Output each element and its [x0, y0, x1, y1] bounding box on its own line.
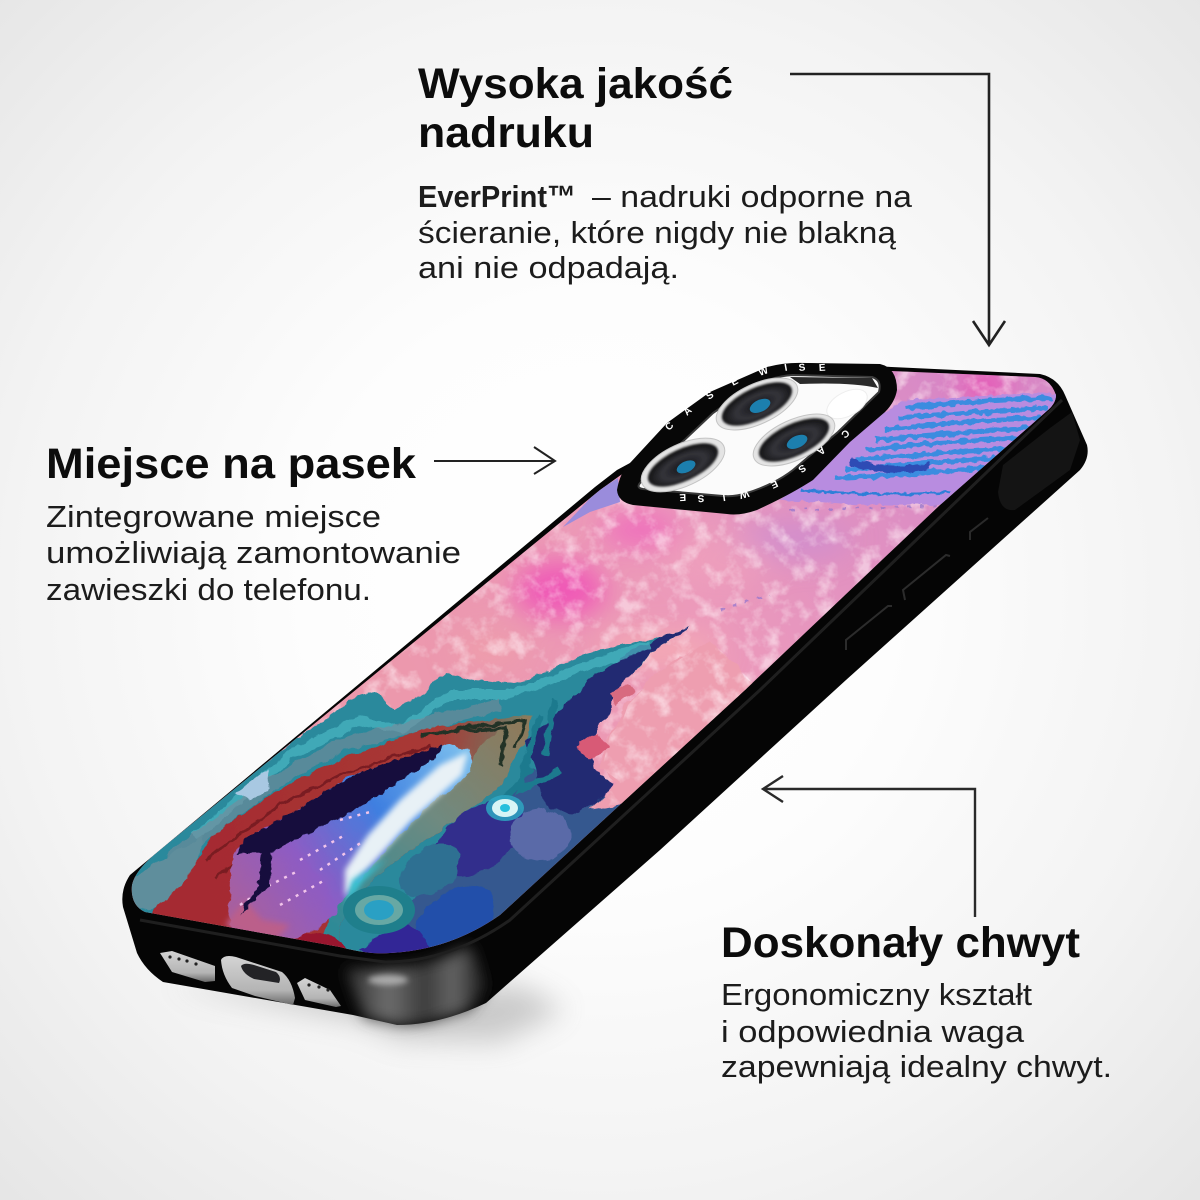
dusty band — [170, 705, 500, 860]
pale teal bands — [195, 645, 650, 838]
cavity — [236, 746, 442, 915]
deep purple — [359, 924, 430, 954]
heading — [418, 60, 733, 157]
body text — [721, 977, 1112, 1084]
brand text top: CASEWISE — [663, 362, 826, 433]
arrow — [434, 447, 555, 474]
blue stripes region — [780, 392, 1060, 505]
speaker right — [297, 978, 341, 1007]
pale blue patch — [236, 770, 270, 800]
callout: strap slot — [46, 440, 555, 607]
heading: Doskonały chwyt — [721, 919, 1080, 967]
red patches — [576, 734, 610, 760]
pink marble base — [132, 371, 1056, 954]
callout: print quality — [418, 60, 1005, 345]
body text: – nadruki odporne na — [592, 179, 913, 214]
left grey patch — [132, 836, 202, 910]
geode pink lower — [224, 901, 289, 936]
phone shadow — [170, 985, 565, 1042]
side button volume up — [903, 555, 950, 600]
camera bump — [617, 363, 897, 514]
body text — [418, 179, 913, 285]
inner top shadow — [790, 377, 878, 388]
agate eye small — [343, 886, 415, 934]
geode crystals — [228, 746, 472, 942]
red agate band — [150, 715, 532, 950]
printed artwork — [132, 371, 1056, 954]
brand text bottom: CASEWISE — [679, 427, 851, 503]
magenta patches — [454, 373, 1013, 668]
right teal bands — [504, 698, 562, 796]
phone in case — [100, 340, 1100, 1025]
camera island — [617, 362, 897, 514]
body text: Ergonomiczny kształt — [721, 977, 1032, 1012]
red patch small — [610, 684, 634, 704]
body text: i odpowiednia waga — [721, 1014, 1025, 1049]
case rim — [140, 400, 1062, 962]
heading: Wysoka jakość — [418, 60, 733, 108]
flash — [822, 383, 872, 425]
geode white streak — [345, 752, 468, 897]
body text: umożliwiają zamontowanie — [46, 535, 461, 570]
corner highlight — [368, 975, 408, 985]
body text: zapewniają idealny chwyt. — [721, 1049, 1112, 1084]
speaker left — [160, 951, 215, 982]
body text: EverPrint™ — [418, 179, 576, 214]
body text — [46, 499, 461, 607]
lilac speckle — [720, 506, 940, 610]
lens top — [709, 367, 805, 441]
heading: nadruku — [418, 109, 594, 157]
lens left — [633, 427, 733, 503]
arrow — [790, 74, 1005, 345]
grey-blue right — [510, 809, 570, 861]
right pink remainder — [590, 640, 760, 810]
heading: Miejsce na pasek — [46, 440, 416, 488]
body text: Zintegrowane miejsce — [46, 499, 381, 534]
body text: zawieszki do telefonu. — [46, 572, 371, 607]
agate eye large — [486, 795, 524, 821]
navy vein — [525, 627, 690, 815]
callout: grip — [721, 776, 1112, 1084]
band striping — [205, 745, 430, 880]
body text: ścieranie, które nigdy nie blakną — [418, 215, 897, 250]
camera opening — [639, 375, 880, 496]
agate — [132, 626, 752, 954]
arrow — [763, 776, 975, 917]
geode sparkle — [239, 797, 374, 906]
band right arm — [318, 715, 532, 950]
purple swirl — [435, 800, 523, 877]
strap slot — [998, 412, 1080, 510]
lower right mottled base — [408, 768, 622, 930]
blue blob — [416, 886, 494, 947]
lower marble mottling — [592, 649, 752, 808]
lower red — [296, 933, 346, 948]
corner gloss — [345, 945, 488, 1025]
marble mottling — [132, 371, 1055, 946]
side button small — [970, 518, 988, 540]
dark ridge — [420, 722, 525, 765]
side button volume down — [846, 606, 892, 650]
teal layer — [135, 626, 690, 952]
teal blob — [399, 844, 460, 897]
lens right — [746, 403, 842, 477]
charging port — [221, 956, 295, 1005]
case body — [122, 363, 1088, 1025]
body text: ani nie odpadają. — [418, 250, 679, 285]
cyan streak — [343, 860, 385, 903]
stripes left of camera — [563, 478, 620, 527]
